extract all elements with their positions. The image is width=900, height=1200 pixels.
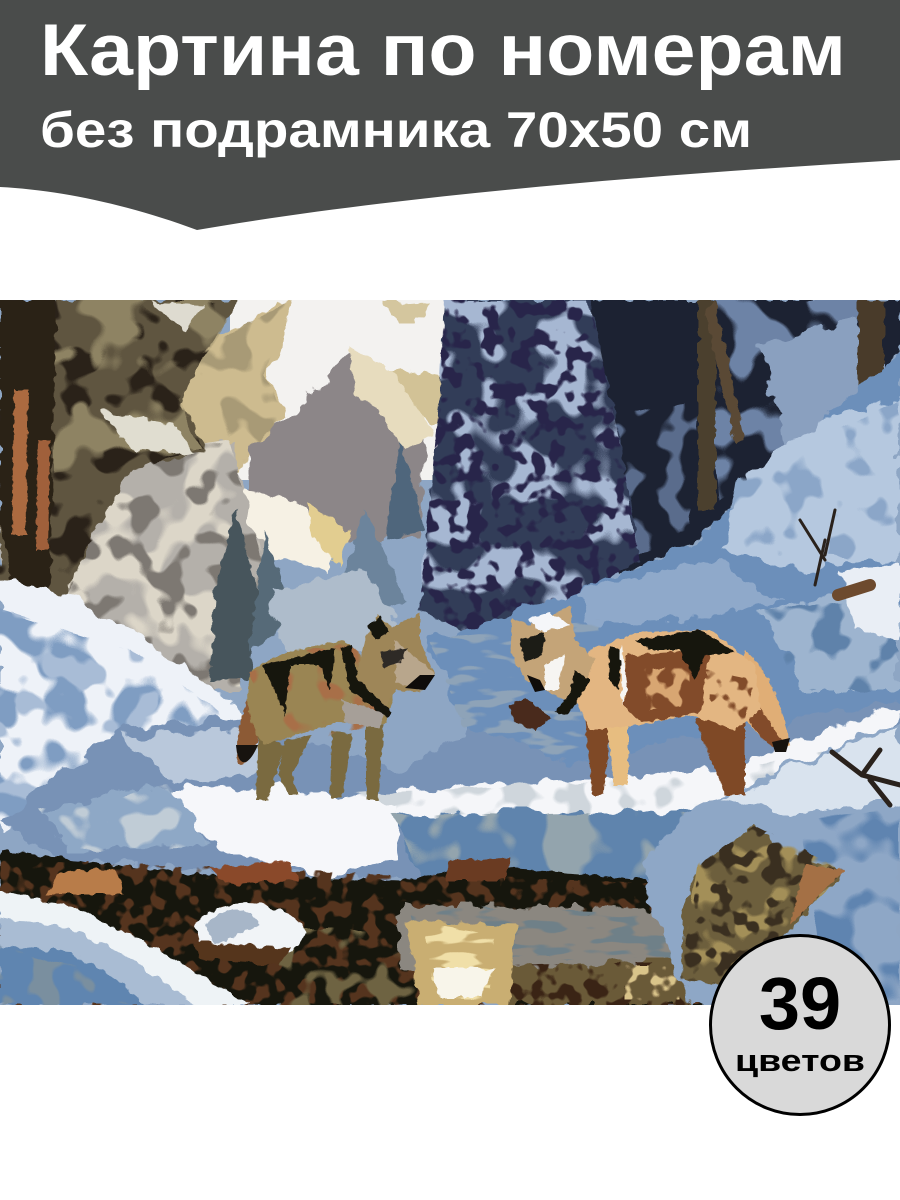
rock by wolf [508, 698, 552, 731]
left hazy forest [0, 440, 265, 690]
left wolf body [248, 640, 395, 745]
left wolf legs [256, 725, 384, 800]
right wolf tail [744, 650, 790, 746]
bare branches [800, 510, 900, 805]
stream and dark bank [0, 850, 720, 1005]
badge number: 39 [759, 962, 841, 1045]
left wolf tail [236, 698, 258, 766]
bottom left snow drift [0, 892, 250, 1005]
golden clouds [170, 300, 445, 470]
rounded snowy stones [195, 904, 308, 965]
left pine trees [0, 300, 240, 610]
right blue snow slope [430, 350, 900, 760]
right snow mound [640, 720, 900, 1005]
right wolf body [570, 630, 760, 730]
distant mountain [228, 345, 435, 570]
subtitle: без подрамника 70х50 см [40, 102, 752, 158]
right wolf legs [584, 717, 746, 796]
painting: wolves in winter forest [0, 300, 900, 1005]
badge: 39 colours [710, 936, 890, 1114]
mid distance dark firs [210, 440, 425, 680]
left snow bank [0, 580, 250, 830]
badge circle [710, 936, 890, 1114]
foreground boulder [680, 825, 845, 985]
header banner [0, 0, 900, 230]
central snow ground [0, 700, 900, 890]
right wolf [510, 606, 790, 795]
large central snowy fir [420, 300, 640, 640]
badge caption: цветов [735, 1043, 865, 1078]
title: Картина по номерам [40, 10, 846, 91]
left wolf head [356, 612, 435, 692]
right wolf head [510, 606, 595, 705]
right background forest [580, 300, 900, 575]
left wolf [236, 613, 435, 800]
sky and base colours [0, 300, 900, 1005]
